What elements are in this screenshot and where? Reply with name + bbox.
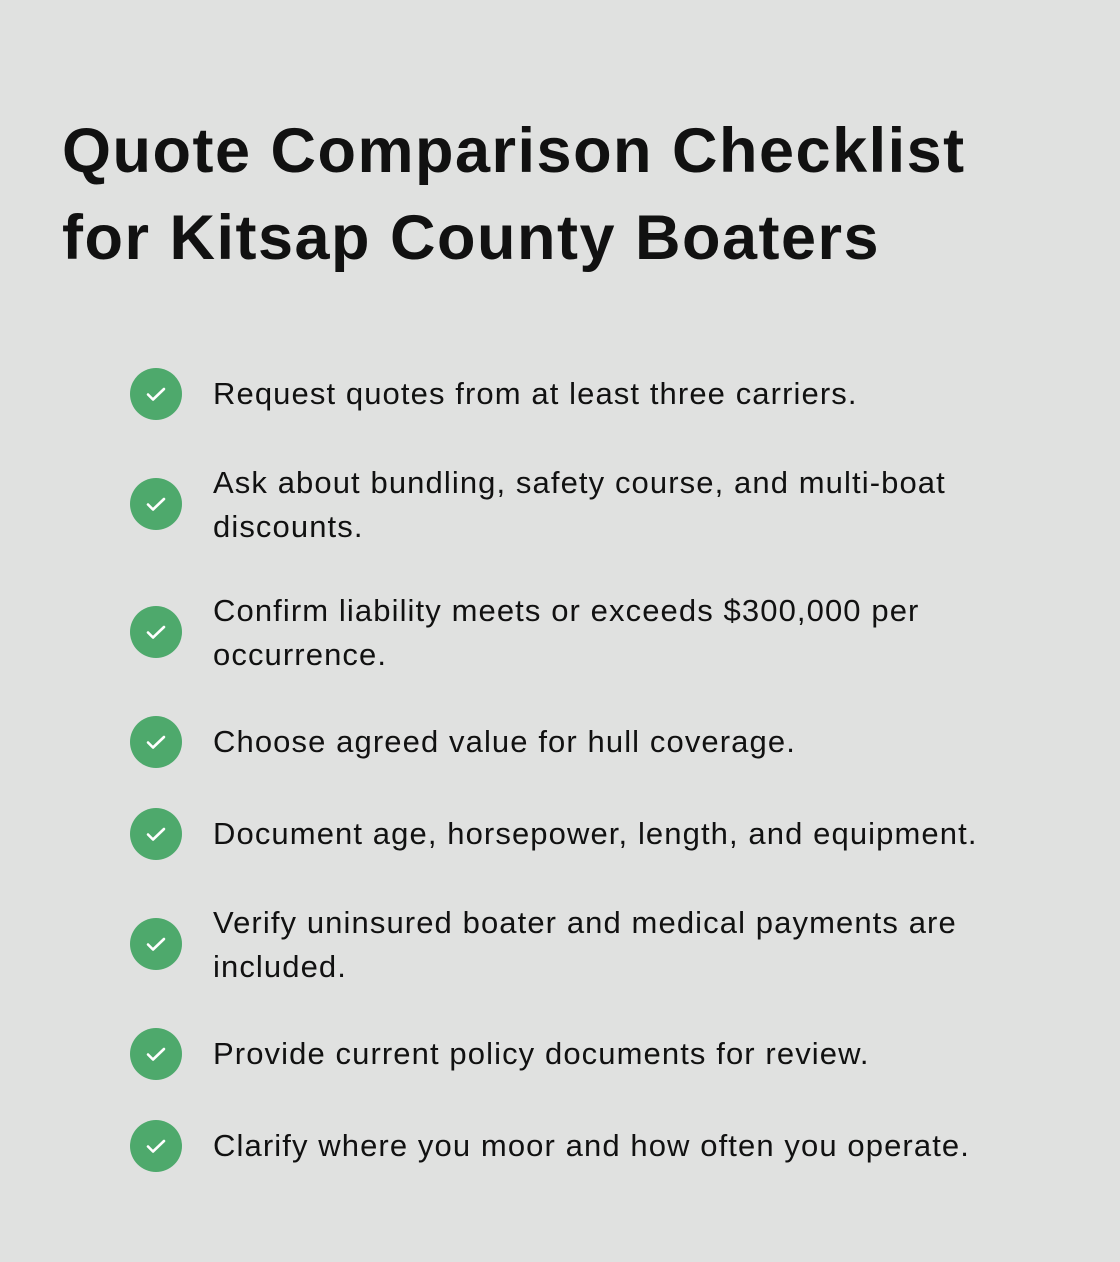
text: Ask about bundling, safety course, and multi-boat: [213, 465, 946, 500]
icon: check: [130, 1028, 182, 1080]
text: Clarify where you moor and how often you operate.: [213, 1128, 970, 1163]
title: [62, 116, 966, 273]
item 6: [130, 905, 957, 984]
icon: check: [130, 716, 182, 768]
text: Verify uninsured boater and medical payments are: [213, 905, 957, 940]
icon: check: [130, 368, 182, 420]
text: Provide current policy documents for review.: [213, 1036, 870, 1071]
text: [213, 593, 919, 672]
icon: check: [130, 478, 182, 530]
icon: check: [130, 606, 182, 658]
text: occurrence.: [213, 637, 387, 672]
item 7: [130, 1028, 870, 1080]
icon: check: [130, 918, 182, 970]
text: [213, 905, 957, 984]
title: for Kitsap County Boaters: [62, 203, 880, 273]
icon: check: [130, 808, 182, 860]
text: [213, 465, 946, 544]
icon: check: [130, 1120, 182, 1172]
text: Request quotes from at least three carriers.: [213, 376, 858, 411]
title: Quote Comparison Checklist: [62, 116, 966, 186]
text: discounts.: [213, 509, 364, 544]
text: included.: [213, 949, 347, 984]
text: Document age, horsepower, length, and equipment.: [213, 816, 978, 851]
item 4: [130, 716, 796, 768]
text: Confirm liability meets or exceeds $300,000 per: [213, 593, 919, 628]
item 8: [130, 1120, 970, 1172]
item 1: [130, 368, 858, 420]
item 5: [130, 808, 978, 860]
item 2: [130, 465, 946, 544]
item 3: [130, 593, 919, 672]
text: Choose agreed value for hull coverage.: [213, 724, 796, 759]
